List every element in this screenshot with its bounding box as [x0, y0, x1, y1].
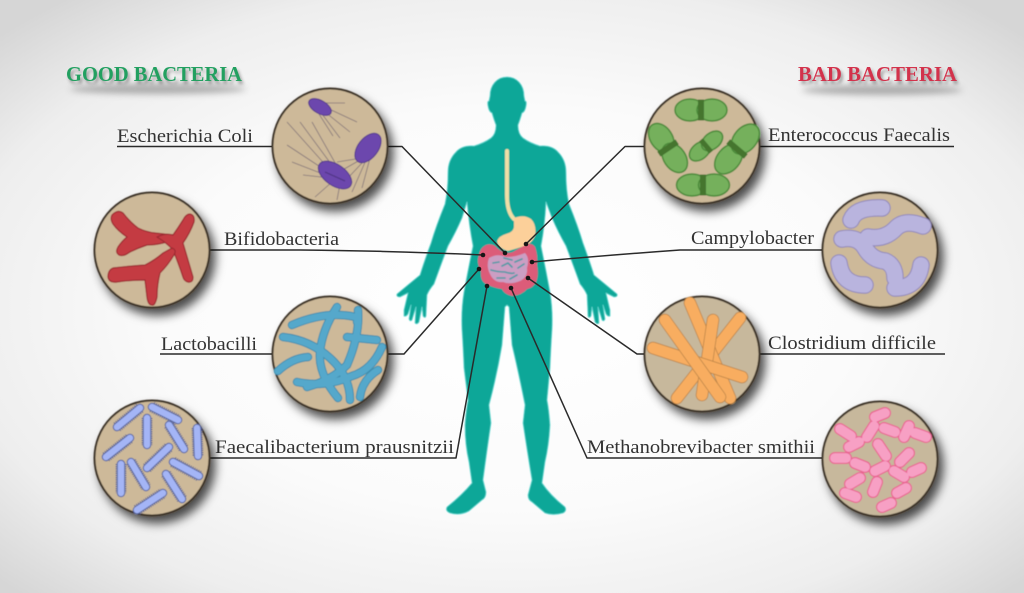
- line: Bifidobacteria: [210, 250, 483, 255]
- heading: good bacteria: GOOD BACTERIA: [66, 62, 243, 86]
- organ: small intestine: [488, 253, 528, 283]
- line: Campylobacter: [532, 250, 822, 262]
- circle: Escherichia Coli bacteria: [272, 88, 388, 204]
- circle: Campylobacter: [822, 192, 938, 308]
- organ: stomach: [497, 216, 536, 251]
- label: Escherichia Coli: Escherichia Coli: [117, 127, 253, 147]
- label: Lactobacilli: Lactobacilli: [161, 335, 257, 355]
- heading: bad bacteria: BAD BACTERIA: [798, 62, 958, 86]
- line: Clostridium difficile: [528, 278, 945, 354]
- label: Bifidobacteria: Bifidobacteria: [224, 230, 339, 250]
- circle: Lactobacilli: [272, 296, 388, 412]
- label: Enterococcus Faecalis: Enterococcus Faecalis: [768, 126, 950, 146]
- line: Lactobacilli: [160, 269, 479, 354]
- connection dots: [477, 242, 534, 290]
- label: Methanobrevibacter smithii: Methanobrevibacter smithii: [587, 438, 815, 458]
- circle: Bifidobacteria: [94, 192, 210, 308]
- connector lines and dots: [117, 146, 954, 458]
- line: Methanobrevibacter smithii: [511, 288, 822, 458]
- line: Enterococcus Faecalis: [526, 146, 954, 244]
- human body figure: [397, 77, 617, 514]
- line: Escherichia Coli: [117, 146, 505, 253]
- circle: Methanobrevibacter smithii: [822, 402, 938, 516]
- heading: good bacteria: GOOD BACTERIA: [68, 65, 245, 89]
- label: Campylobacter: Campylobacter: [691, 229, 814, 249]
- line: Faecalibacterium prausnitzii: [210, 286, 487, 458]
- circle: Clostridium difficile: [644, 296, 760, 412]
- circle: Enterococcus Faecalis: [643, 88, 765, 204]
- organ: large intestine: [478, 244, 538, 296]
- organ: esophagus: [507, 151, 514, 219]
- circle: Faecalibacterium prausnitzii: [94, 400, 210, 516]
- label: Faecalibacterium prausnitzii: Faecalibacterium prausnitzii: [215, 438, 454, 458]
- label: Clostridium difficile: Clostridium difficile: [768, 334, 936, 354]
- heading: bad bacteria: BAD BACTERIA: [800, 65, 960, 89]
